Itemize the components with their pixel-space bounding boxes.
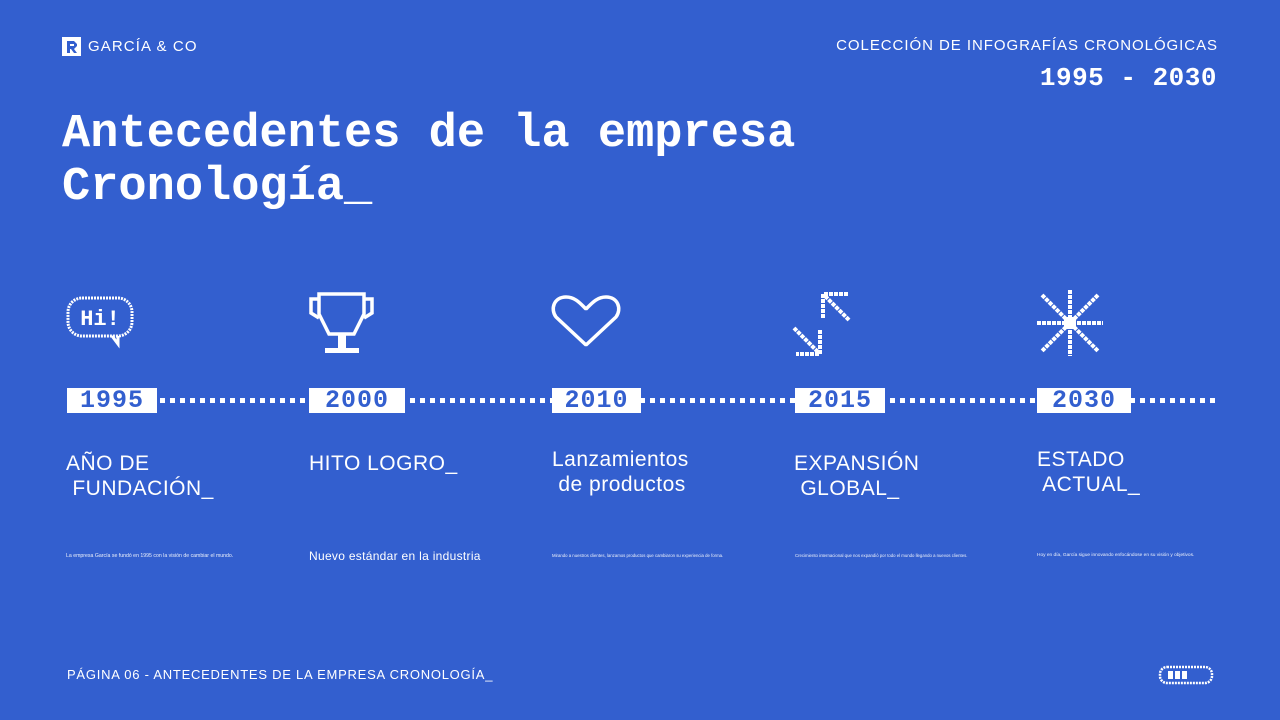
icon: sparkle	[1037, 290, 1103, 356]
desc 3: Mirando a nuestros clientes, lanzamos productos que cambiaron su experiencia de forma.	[552, 553, 723, 558]
desc 2: Nuevo estándar en la industria	[309, 549, 481, 563]
year 2015: 2015	[808, 386, 872, 415]
year range: 1995 - 2030	[1040, 63, 1217, 93]
year 2010: 2010	[564, 386, 628, 415]
icon: trophy	[309, 292, 374, 353]
icon: speech bubble Hi: Hi!	[80, 307, 120, 332]
heading 2: HITO LOGRO_	[309, 452, 458, 475]
year 2000: 2000	[325, 386, 389, 415]
year 2030	[1037, 388, 1131, 413]
year 1995: 1995	[80, 386, 144, 415]
year 2030: 2030	[1052, 386, 1116, 415]
heading 1: AÑO DE FUNDACIÓN_	[66, 452, 214, 500]
year 2015	[795, 388, 885, 413]
header right: COLECCIÓN DE INFOGRAFÍAS CRONOLÓGICAS	[836, 37, 1218, 54]
year 1995	[67, 388, 157, 413]
desc 4: Crecimiento internacional que nos expandió por todo el mundo llegando a nuevos clientes.	[795, 553, 967, 558]
year 2010	[552, 388, 641, 413]
heading 3: Lanzamientos de productos	[552, 448, 689, 496]
heading 5: ESTADO ACTUAL_	[1037, 448, 1140, 496]
icon: speech bubble Hi	[66, 296, 134, 348]
icon: arrows	[792, 292, 850, 356]
logo: GARCÍA & CO	[88, 38, 198, 54]
title: Antecedentes de la empresa Cronología_	[62, 108, 795, 214]
desc 5: Hoy en día, García sigue innovando enfocándose en su visión y objetivos.	[1037, 553, 1194, 558]
desc 1: La empresa García se fundó en 1995 con la visión de cambiar el mundo.	[66, 553, 233, 559]
footer text: PÁGINA 06 - ANTECEDENTES DE LA EMPRESA CRONOLOGÍA_	[67, 667, 493, 682]
icon: heart	[552, 295, 620, 346]
icon: battery	[1158, 666, 1214, 684]
heading 4: EXPANSIÓN GLOBAL_	[794, 452, 919, 500]
year 2000	[309, 388, 405, 413]
